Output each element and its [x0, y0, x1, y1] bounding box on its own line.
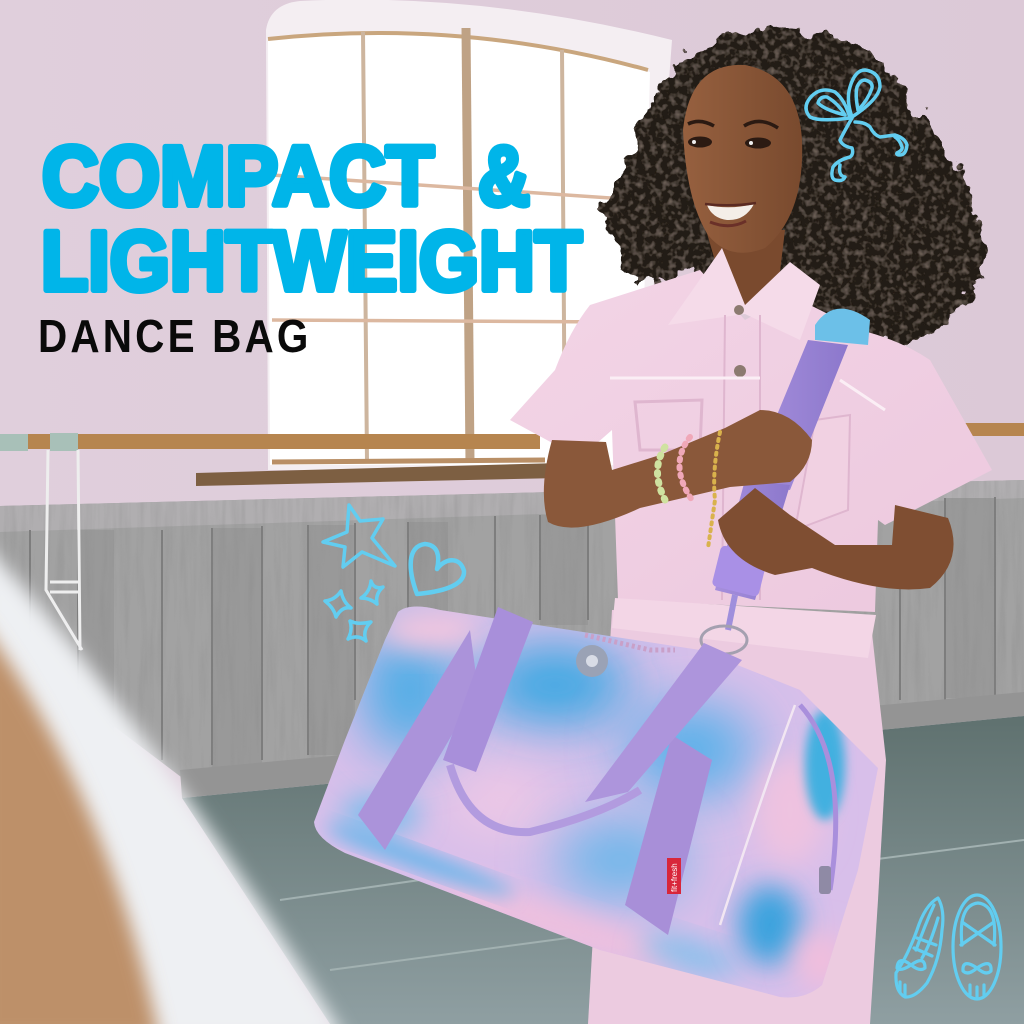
arm right with hand — [718, 488, 954, 589]
keychain beads — [585, 635, 675, 650]
heading line 2: LIGHTWEIGHT — [41, 214, 582, 308]
wall — [0, 0, 1024, 520]
shoulder strap — [701, 309, 870, 654]
icon: small sparkles — [325, 581, 383, 641]
curly hair — [600, 28, 985, 345]
collar — [668, 248, 820, 340]
neck — [706, 230, 785, 312]
bracelets — [658, 432, 720, 548]
red brand tag — [667, 858, 681, 894]
webbing straps — [358, 630, 478, 850]
ballet barre — [0, 423, 1024, 650]
red brand tag: fit+fresh — [670, 863, 679, 892]
logo badge — [576, 645, 608, 677]
zipper pull — [819, 866, 831, 894]
heading line 1: COMPACT — [42, 129, 434, 223]
bag body — [314, 606, 878, 998]
jumpsuit pants — [588, 610, 886, 1024]
window sill — [196, 463, 560, 486]
dark floor — [182, 716, 1024, 1024]
girl — [510, 28, 992, 1024]
duffel bag — [314, 606, 878, 998]
jumpsuit top — [510, 270, 992, 612]
face — [683, 65, 802, 253]
window — [266, 0, 672, 470]
elastic waist — [612, 598, 876, 658]
placket and pockets — [610, 305, 885, 600]
eyes, brows, smile — [688, 121, 778, 226]
wood wainscot — [0, 480, 1024, 798]
top handle — [443, 607, 533, 772]
blurred foreground barre — [0, 540, 345, 1024]
icon: heart — [411, 544, 464, 594]
icon: bow — [806, 70, 907, 181]
heading — [38, 129, 582, 363]
icon: outline star — [323, 505, 395, 567]
heading line 1: & — [478, 129, 530, 223]
arm left with hand — [544, 410, 812, 528]
subheading: DANCE BAG — [38, 312, 312, 363]
icon: ballet shoes — [896, 895, 1001, 999]
